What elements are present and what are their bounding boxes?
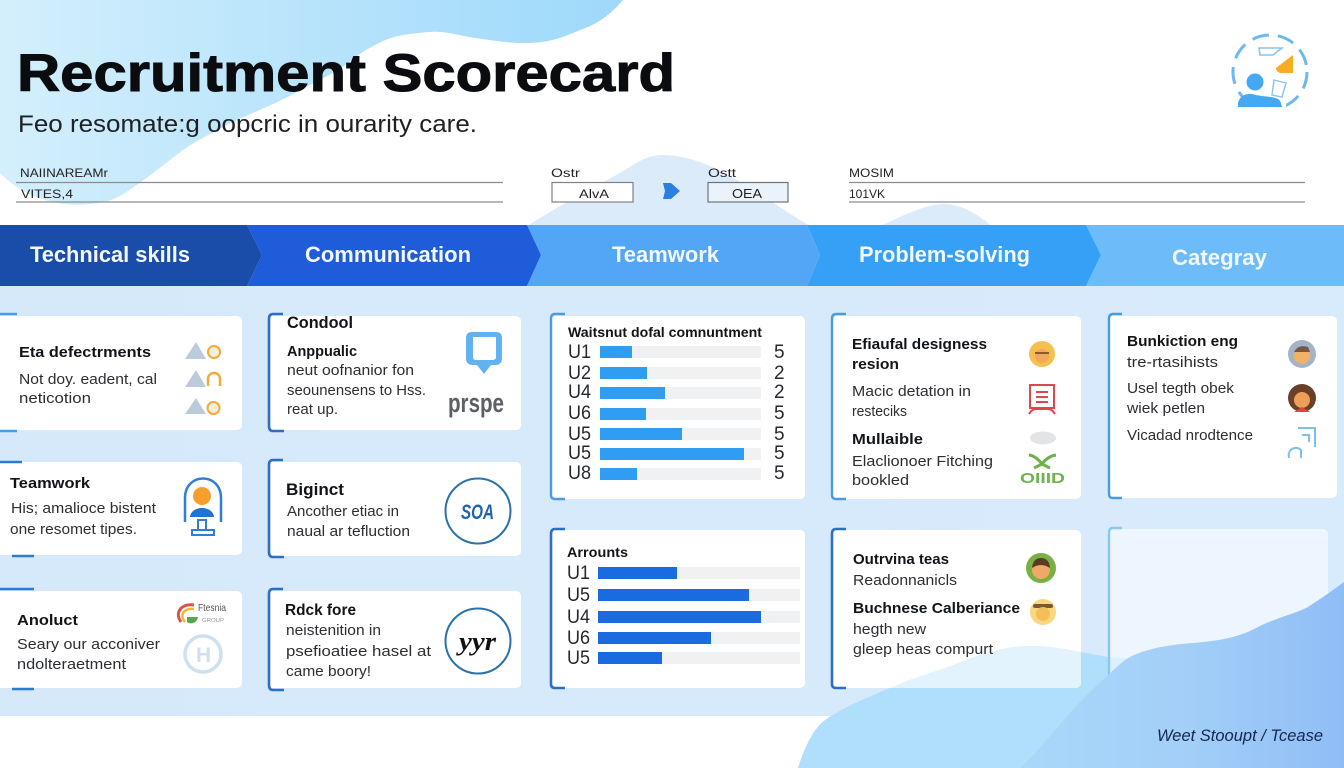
bar chart: seven rows [568, 342, 785, 484]
bar chart: five rows: U4 [567, 607, 590, 628]
panel: technical skills card 2 [0, 462, 242, 556]
header: Communication [247, 225, 541, 286]
background: bottom deep wave [1020, 582, 1344, 768]
icon: pale H badge: H [196, 644, 211, 667]
logo: yyr badge [446, 608, 510, 674]
icon: avatar yellow [1029, 341, 1055, 367]
icon: pale H badge [185, 636, 221, 672]
header: Technical skills [0, 225, 262, 286]
icon: avatar green [1026, 553, 1056, 583]
icon: green leaf logo [1020, 455, 1065, 487]
panel: communication card 3: neistenition in [286, 623, 381, 639]
subtitle: Feo resomate:g oopcric in ourarity care. [18, 111, 477, 138]
icon: green leaf logo: OIIID [1020, 470, 1065, 487]
panel: technical skills card 3: Seary our acconiver [17, 637, 160, 653]
panel: problem-solving card 1: Mullaible [852, 431, 923, 448]
footer credit: Weet Stooupt / Tcease [1157, 726, 1323, 745]
panel: teamwork chart 2 [550, 529, 805, 688]
icon: avatar grey [1288, 340, 1316, 368]
icon: red document [1029, 385, 1055, 414]
header: Teamwork: Teamwork [612, 242, 719, 267]
icon: recruiter emblem [1233, 35, 1307, 112]
panel: communication card 2: naual ar tefluction [287, 524, 410, 540]
bar chart: seven rows: U8 [568, 463, 591, 484]
meta: name field: NAIINAREAMr [20, 168, 108, 180]
bar chart: five rows: U5 [567, 648, 590, 669]
icon: rating markers [185, 342, 220, 414]
header: Problem-solving [807, 225, 1101, 286]
header: Communication: Communication [305, 242, 471, 267]
bar chart: five rows: U5 [567, 585, 590, 606]
header: category ribbon [0, 225, 1344, 286]
panel: technical skills card 1: neticotion [19, 391, 91, 407]
panel: communication card 3: psefioatiee hasel at [286, 644, 431, 660]
meta: end field: OEA [732, 186, 762, 201]
background: central hills [527, 155, 992, 226]
bar chart: seven rows: 2 [774, 382, 785, 403]
panel: problem-solving card 1: Elaclionoer Fitching [852, 454, 993, 470]
panel: communication card 1: neut oofnanior fon [287, 363, 414, 379]
meta: end field [708, 168, 788, 202]
bar chart: seven rows: 5 [774, 424, 785, 445]
bar chart: seven rows: U6 [568, 403, 591, 424]
panel: problem-solving card 1: Efiaufal designess [852, 336, 987, 353]
panel: communication card 1 [268, 314, 521, 431]
bar chart: seven rows: U5 [568, 424, 591, 445]
panel: technical skills card 3 [0, 589, 242, 689]
panel: empty translucent card [1108, 528, 1328, 680]
panel: problem-solving card 2 [830, 528, 1081, 690]
panel: category card: Bunkiction eng [1127, 333, 1238, 350]
panel: problem-solving card 2: hegth new [853, 622, 927, 638]
panel: technical skills card 2: Teamwork [10, 475, 91, 492]
header: Problem-solving: Problem-solving [859, 242, 1030, 267]
bar chart: five rows: U6 [567, 628, 590, 649]
panel: communication card 3 [268, 589, 521, 690]
icon: colour logo [178, 602, 226, 624]
icon: grey pill [1030, 432, 1056, 444]
panel: problem-solving card 1: bookled [852, 473, 909, 489]
bar chart: seven rows: 5 [774, 403, 785, 424]
panel: communication card 2: Ancother etiac in [287, 504, 399, 520]
panel: problem-solving card 2: Outrvina teas [853, 551, 949, 568]
panel: teamwork chart 1: Waitsnut dofal comnuntment [568, 325, 763, 340]
meta: mission field [849, 168, 1305, 202]
panel: teamwork chart 1 [550, 314, 805, 499]
icon: colour logo: Ftesnia [198, 602, 226, 614]
header: Teamwork [527, 225, 820, 286]
icon: person under arch [185, 478, 221, 535]
bar chart: five rows [567, 563, 800, 669]
title: Recruitment Scorecard [17, 44, 675, 103]
bar chart: seven rows: U2 [568, 363, 591, 384]
panel: problem-solving card 1: resteciks [852, 404, 907, 420]
panel: category card: wiek petlen [1126, 401, 1205, 417]
panel: category card: tre-rtasihists [1127, 355, 1218, 371]
panel: communication card 2 [268, 460, 521, 557]
meta: start field: Ostr [551, 168, 580, 180]
panel: communication card 1: Anppualic [287, 344, 357, 360]
meta: start field [551, 168, 633, 202]
bar chart: seven rows: 5 [774, 463, 785, 484]
icon: colour logo: GROUP [202, 618, 225, 624]
bar chart: seven rows: 5 [774, 443, 785, 464]
meta: name field [16, 168, 503, 202]
panel: technical skills card 2: one resomet tipes. [10, 522, 137, 538]
panel: technical skills card 3: ndolteraetment [17, 657, 126, 673]
meta: end field: Ostt [708, 168, 737, 180]
bar chart: seven rows: 5 [774, 342, 785, 363]
panel: problem-solving card 2: gleep heas compurt [853, 642, 993, 658]
panel: category card [1108, 314, 1337, 498]
meta: mission field: 101VK [849, 189, 885, 201]
panel: communication card 1: seounensens to Hss. [287, 383, 426, 399]
logo: yyr badge: yyr [456, 627, 497, 656]
icon: speech bubble [466, 332, 502, 374]
panel: category card: Vicadad nrodtence [1127, 428, 1253, 444]
panel: teamwork chart 2: Arrounts [567, 545, 628, 560]
meta: name field: VITES,4 [21, 189, 74, 201]
panel: communication card 1: Condool [287, 314, 353, 332]
panel: problem-solving card 1 [832, 314, 1081, 499]
bar chart: seven rows: U1 [568, 342, 591, 363]
logo: SOA badge: SOA [461, 501, 494, 524]
icon: arrow [663, 183, 680, 199]
header: Technical skills: Technical skills [30, 242, 190, 267]
background: bottom light wave [798, 646, 1150, 768]
logo: SOA badge [446, 478, 510, 544]
panel: technical skills card 2: His; amalioce bistent [11, 501, 156, 517]
background: top-left wave [0, 0, 623, 205]
bar chart: seven rows: U5 [568, 443, 591, 464]
panel: category card: Usel tegth obek [1127, 381, 1235, 397]
panel: technical skills card 3: Anoluct [17, 612, 78, 629]
icon: avatar yellow cap [1030, 599, 1056, 625]
bar chart: five rows: U1 [567, 563, 590, 584]
panel: problem-solving card 2: Buchnese Calberiance [853, 600, 1020, 617]
bar chart: seven rows: 2 [774, 363, 785, 384]
icon: avatar brown [1288, 384, 1316, 412]
logo: prspe: prspe [448, 388, 504, 418]
header: Category [1086, 225, 1344, 286]
panel: communication card 1: reat up. [287, 402, 338, 418]
panel: technical skills card 1: Not doy. eadent, cal [19, 372, 157, 388]
panel: technical skills card 1: Eta defectrments [19, 344, 151, 361]
panel: communication card 2: Biginct [286, 480, 344, 499]
icon: pale blue line glyph [1289, 428, 1315, 458]
panel: problem-solving card 2: Readonnanicls [853, 573, 957, 589]
meta: start field: AlvA [579, 189, 609, 201]
background: content band [0, 286, 1344, 716]
panel: problem-solving card 1: Macic detation in [852, 384, 971, 400]
panel: technical skills card 1 [0, 314, 242, 431]
panel: communication card 3: Rdck fore [285, 602, 356, 619]
panel: communication card 3: came boory! [286, 664, 371, 680]
bar chart: seven rows: U4 [568, 382, 591, 403]
panel: problem-solving card 1: resion [852, 356, 899, 373]
header: Category: Categray [1172, 245, 1267, 270]
meta: mission field: MOSIM [849, 168, 894, 180]
